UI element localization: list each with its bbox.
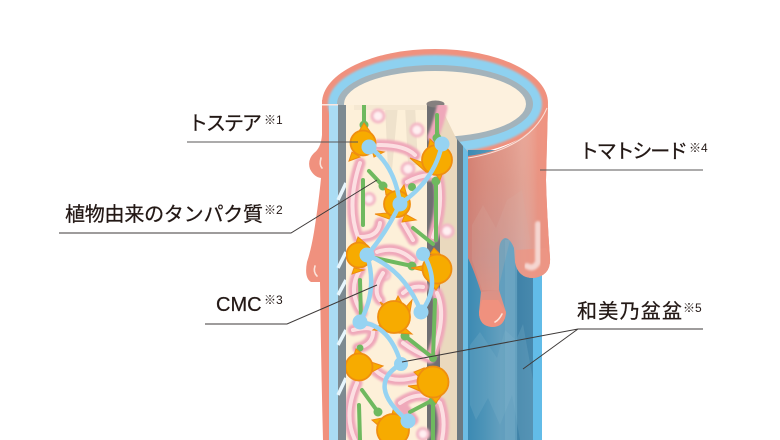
tube illustration bbox=[306, 49, 550, 440]
pink fibres bbox=[349, 108, 444, 440]
green strands bbox=[359, 103, 437, 440]
pink dots bbox=[362, 108, 454, 440]
label: トステア bbox=[187, 113, 358, 142]
orange nodes bbox=[346, 130, 452, 440]
drip highlights bbox=[527, 224, 538, 267]
label: 植物由来のタンパク質: ※2 bbox=[264, 203, 283, 217]
label: 植物由来のタンパク質 bbox=[59, 180, 377, 233]
rim: gray ring bbox=[337, 65, 533, 143]
rim front highlight bbox=[468, 108, 547, 158]
left salmon layer with drips bbox=[306, 100, 340, 440]
orange node spikes bbox=[349, 123, 443, 432]
fibres and nodes bbox=[346, 103, 454, 440]
label: 植物由来のタンパク質: 植物由来のタンパク質 bbox=[65, 203, 263, 226]
zigzag pattern on blue body bbox=[470, 324, 533, 440]
back pole bbox=[427, 103, 440, 440]
left drip highlights bbox=[314, 158, 322, 276]
rim: blue ring bbox=[328, 55, 542, 153]
label: CMC bbox=[205, 285, 377, 324]
label: CMC: ※3 bbox=[264, 293, 283, 307]
front cut strips bbox=[457, 139, 463, 440]
rim: cream interior bbox=[344, 71, 526, 137]
infographic: tube cross-section with labels bbox=[59, 49, 708, 440]
front right tube body: blue bbox=[468, 150, 533, 440]
label: 和美乃盆盆: 和美乃盆盆 bbox=[577, 300, 682, 323]
salmon coating with drips on right tube bbox=[468, 104, 550, 327]
label: トマトシード: トマトシード bbox=[579, 141, 688, 163]
label: トマトシード: ※4 bbox=[689, 141, 708, 155]
label: 和美乃盆盆 bbox=[402, 300, 703, 369]
label: CMC: CMC bbox=[216, 294, 262, 316]
zigzag pattern on salmon bbox=[472, 190, 530, 290]
label: トステア: ※1 bbox=[264, 113, 283, 127]
label: トマトシード bbox=[540, 141, 708, 170]
left wall strips bbox=[322, 104, 346, 440]
inner cut panel bbox=[346, 100, 457, 440]
light blue connectors bbox=[360, 144, 442, 421]
rim: salmon ring bbox=[322, 49, 548, 157]
label: トステア: トステア bbox=[188, 113, 262, 135]
label: 和美乃盆盆: ※5 bbox=[683, 301, 702, 315]
